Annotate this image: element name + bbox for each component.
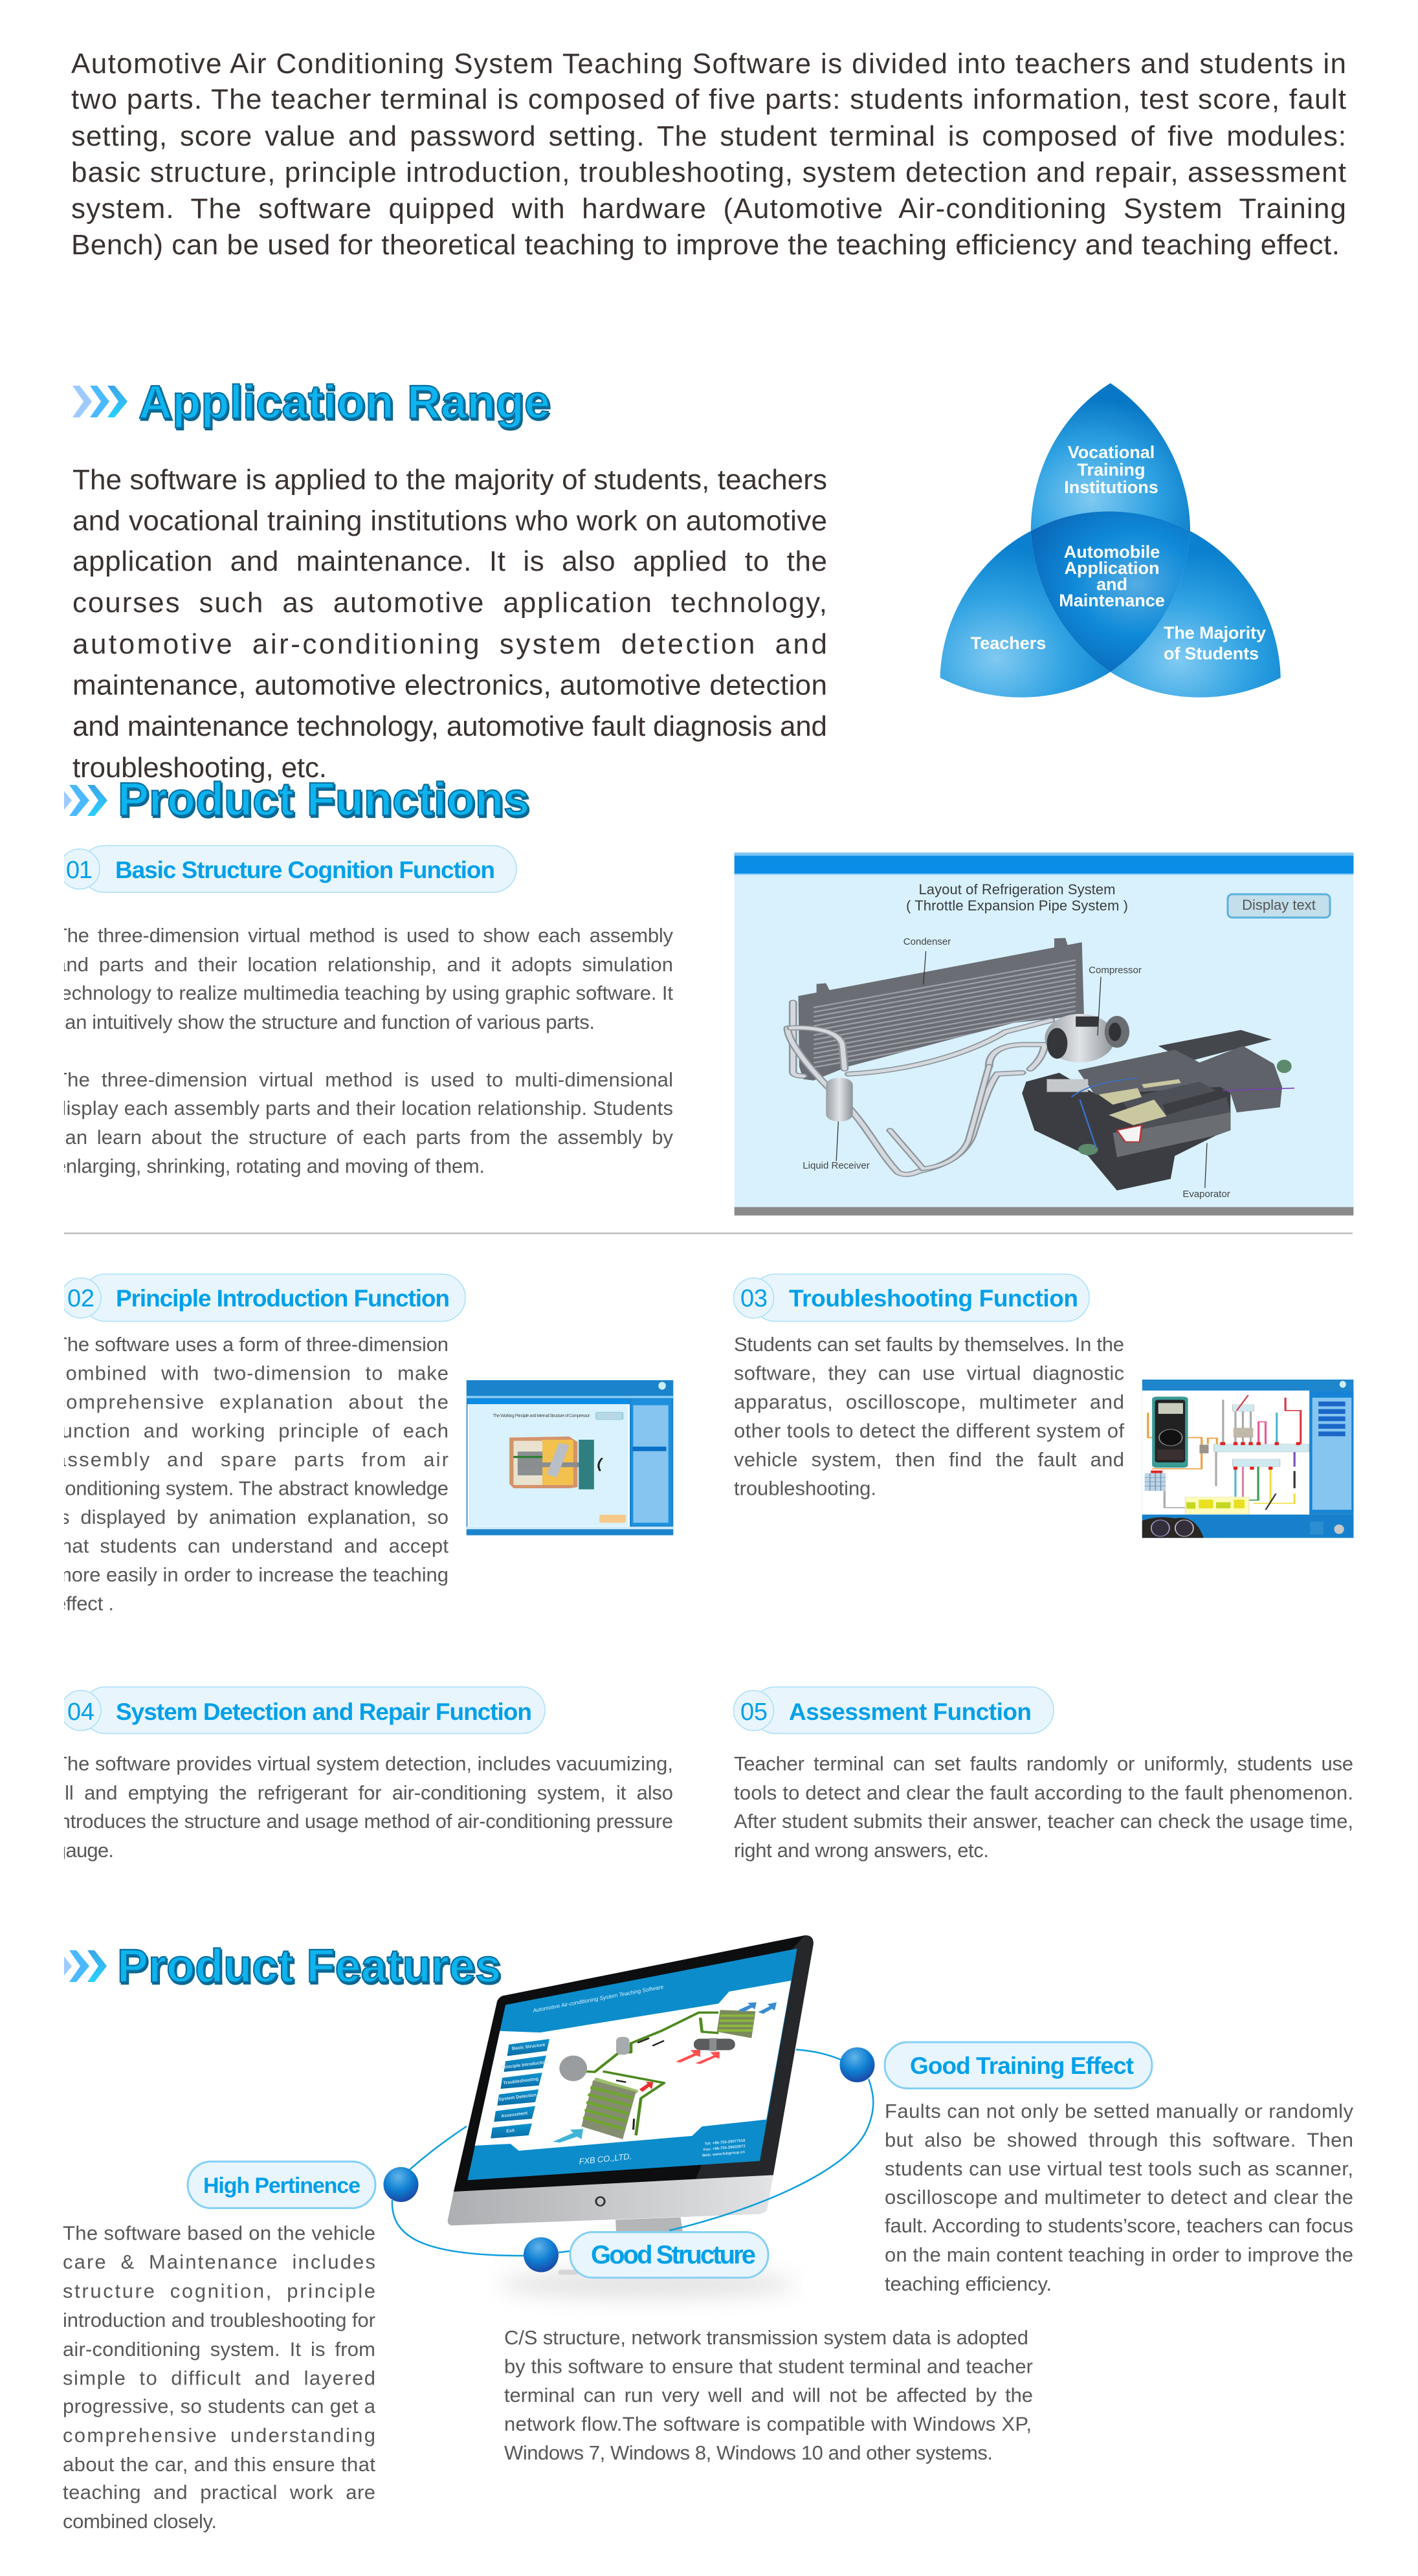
panel: function 02 [55,1274,673,1615]
text: good training effect description: teaching efficiency. [885,2273,1052,2295]
intro paragraph: two parts. The teacher terminal is composed of five parts: students information, test score, fault [71,83,1346,115]
refrigerant circuit [583,2012,718,2135]
icon: ball high pertinence [383,2167,418,2202]
text: good training effect description [885,2100,1354,2295]
text: function 05 description: Teacher terminal can set faults randomly or uniformly, students use [734,1752,1353,1775]
menu labels: Exit [506,2128,515,2134]
intro paragraph: Automotive Air Conditioning System Teaching Software is divided into teachers and students in [71,48,1346,80]
text: function 03 description: Students can set faults by themselves. In the [734,1333,1124,1356]
text: function 02 description: combined with two-dimension to make [55,1361,449,1385]
connector lines [392,2050,873,2256]
label: Teachers: Teachers [971,633,1046,653]
yellow module [1185,1497,1249,1514]
panel: function 05 [734,1687,1353,1862]
intro paragraph: basic structure, principle introduction, troubleshooting, system detection and repair, assessment [71,157,1346,188]
text: application range description: The software is applied to the majority of students, teachers [72,464,827,496]
text: function 02 description: function and working principle of each [55,1420,449,1442]
fuse grid [1145,1473,1166,1491]
pill heading 05: Assessment Function [789,1699,1032,1725]
contact details: Tel: +86-755-29077518 [705,2139,746,2146]
text: function 01 description: enlarging, shrinking, rotating and moving of them. [55,1154,485,1178]
part labels [803,936,1230,1200]
callout: High Pertinence [188,2161,375,2208]
part labels: Liquid Receiver [803,1160,870,1171]
text: function 01 description: and parts and their location relationship, and it adopts simulation [55,953,673,976]
text: function 02 description [55,1333,449,1615]
text: good structure description: terminal can run very well and will not be affected by the [504,2384,1033,2406]
text: good structure description: by this software to ensure that student terminal and teacher [504,2355,1033,2377]
pill heading 03 [734,1274,1089,1321]
text: function 01 description: The three-dimension virtual method is used to show each assembly [55,924,673,947]
label: Vocational Training Institutions: Institutions [1064,478,1158,497]
text: function 04 description: fill and emptying the refrigerant for air-conditioning system, it also [55,1781,673,1804]
evaporator housing [1022,1030,1294,1191]
text: function 02 description: is displayed by animation explanation, so [55,1506,449,1528]
button: play animation [599,1515,626,1523]
text: high pertinence description: simple to difficult and layered [63,2367,375,2389]
air arrows [553,2002,777,2142]
monitor stand [615,2218,683,2232]
screen caption: The Working Principle and Internal Structure of Compressor [493,1414,590,1418]
monitor shadow [498,2270,796,2298]
text: function 02 description: that students can understand and accept [55,1535,449,1557]
sidebar items [1318,1402,1346,1437]
menu labels: Principle Introduction [501,2060,548,2070]
icon: ball good training effect [840,2047,875,2082]
label: Automobile Application and Maintenance: and [1096,575,1127,594]
contact details [702,2139,746,2158]
text: function 01 description: The three-dimension virtual method is used to multi-dimensional [55,1068,673,1091]
pill heading 02: Principle Introduction Function [116,1285,450,1312]
label: Vocational Training Institutions [1064,443,1158,497]
label: Vocational Training Institutions: Vocational [1068,443,1155,462]
text: function 02 description: comprehensive explanation about the [55,1391,449,1413]
petal: top [1031,383,1190,531]
text: function 02 description: more easily in order to increase the teaching [55,1563,449,1586]
wiring [1148,1398,1301,1508]
pill heading 01 [60,846,516,892]
text: function 02 description: The software uses a form of three-dimension [55,1333,449,1356]
text: function 02 description: assembly and spare parts from air [55,1448,449,1471]
label: The Majority of Students: The Majority [1164,623,1266,643]
condenser [799,938,1084,1081]
instrument gauges [1142,1517,1344,1538]
label: Automobile Application and Maintenance: Application [1064,558,1160,578]
text: function 01 description: can learn about the structure of each parts from the assembly by [55,1126,673,1149]
multimeter [1152,1396,1188,1468]
intro paragraph: setting, score value and password setting. The student terminal is composed of five modules: [71,120,1346,152]
compressor [1045,1014,1129,1062]
text: good training effect description: but also be showed through this software. Then [885,2129,1353,2151]
label: Automobile Application and Maintenance: Automobile [1064,542,1160,562]
pill heading 03: Troubleshooting Function [789,1285,1078,1312]
part labels: Compressor [1089,965,1142,976]
screen title: Automotive Air-conditioning System Teaching Software [532,1983,664,2014]
menu labels [498,2043,548,2134]
text: application range description: troubleshooting, etc. [72,752,327,784]
label: Automobile Application and Maintenance: Maintenance [1059,591,1165,610]
label: Vocational Training Institutions: Training [1077,460,1146,479]
label: The Majority of Students: of Students [1164,644,1259,663]
button: Display text: Display text [1242,897,1316,913]
text: application range description: maintenance, automotive electronics, automotive detection [72,669,827,701]
icon: chevrons product functions [64,785,107,816]
contact details: Fax: +86-755-29632973 [703,2144,746,2152]
pill heading 03: 03 [740,1285,768,1312]
icon: ball good structure [524,2238,559,2273]
text: good training effect description: oscilloscope and multimeter to detect and clear the [885,2186,1353,2208]
part labels: Condenser [903,936,951,947]
liquid receiver [826,1078,853,1121]
text: application range description: application and maintenance. It is also applied to the [72,545,827,577]
software screen [467,1948,797,2180]
text: good training effect description: on the main content teaching in order to improve the [885,2243,1353,2266]
panel: function 04 [55,1687,673,1862]
red terminals [1151,1442,1300,1473]
screenshot: compressor structure [467,1380,673,1536]
button: Display text [1228,894,1330,918]
heading: Product Features: Product Features [117,1941,501,1992]
label: Automobile Application and Maintenance [1059,542,1165,610]
diagram title: Layout of Refrigeration System [919,881,1116,897]
liquid receiver [616,2037,629,2054]
petal: right [1111,531,1281,698]
condenser coil [581,2080,636,2139]
text: high pertinence description: care & Maintenance includes [63,2251,375,2273]
text: application range description: automotive air-conditioning system detection and [72,628,827,660]
pill heading 01: Basic Structure Cognition Function [115,857,495,883]
text: high pertinence description: progressive, so students can get a [63,2395,376,2417]
icon: chevrons application range [72,386,127,417]
text: application range description: and vocational training institutions who work on automotive [72,505,827,537]
menu labels: Assessment [501,2111,528,2119]
text: function 03 description [734,1333,1124,1500]
text: high pertinence description: combined closely. [63,2510,217,2533]
text: high pertinence description: air-conditioning system. It is from [63,2338,375,2361]
leader lines [836,951,1207,1188]
pill heading 04: 04 [67,1699,94,1726]
diagram title [906,881,1128,914]
text: high pertinence description: structure cognition, principle [63,2280,375,2302]
text: function 05 description: tools to detect and clear the fault according to the fault phenomenon. [734,1781,1353,1804]
text: function 01 description [55,924,673,1178]
text: function 01 description: display each assembly parts and their location relationship. Students [55,1097,673,1119]
intro paragraph: system. The software quipped with hardware (Automotive Air-conditioning System Training [71,193,1346,225]
text: function 03 description: troubleshooting. [734,1477,876,1500]
text: good structure description [504,2326,1033,2464]
text: function 04 description [55,1752,673,1862]
text: function 04 description: The software provides virtual system detection, includes vacuumizing, [55,1752,673,1775]
petal: center [1031,511,1190,672]
text: function 04 description: introduces the structure and usage method of air-conditioning pressure [55,1810,673,1833]
pill heading 02: 02 [67,1285,94,1312]
text: application range description: courses such as automotive application technology, [72,587,827,619]
text: good training effect description: fault. According to students’score, teachers can focus [885,2214,1353,2237]
intro paragraph: Bench) can be used for theoretical teaching to improve the teaching efficiency and teaching effect. [71,229,1340,261]
panel: function 01 [55,846,673,1178]
menu labels: Basic Structure [512,2043,546,2051]
menu labels: System Detection [498,2093,537,2102]
panel: function 03 [734,1274,1353,1538]
text: good structure description: Windows 7, Windows 8, Windows 10 and other systems. [504,2441,993,2464]
text: function 05 description [734,1752,1353,1862]
text: function 02 description: effect . [55,1592,114,1615]
text: high pertinence description: about the car, and this ensure that [63,2453,375,2476]
text: high pertinence description: The software based on the vehicle [63,2222,375,2244]
company name: FXB CO.,LTD. [579,2151,632,2166]
text: function 04 description: gauge. [55,1839,114,1862]
pill heading 02 [61,1274,465,1321]
callout: Good Structure [570,2232,768,2278]
callout: Good Training Effect: Good Training Effect [910,2053,1134,2079]
pill heading 01: 01 [66,857,93,884]
intro paragraph [71,48,1346,261]
text: function 03 description: vehicle system, then find the fault and [734,1448,1124,1471]
pill heading 04: System Detection and Repair Function [116,1699,532,1725]
text: function 01 description: technology to realize multimedia teaching by using graphic software. It [55,982,673,1004]
text: function 01 description: can intuitively show the structure and function of various parts. [55,1011,595,1033]
menu labels: Troubleshooting [503,2077,538,2086]
callout: Good Structure: Good Structure [591,2241,756,2269]
screenshot: troubleshooting wiring [1142,1380,1353,1538]
compressor [559,2056,587,2081]
monitor chin [448,2175,773,2225]
petal: left [940,531,1111,698]
diagram title: ( Throttle Expansion Pipe System ) [906,897,1128,914]
text: high pertinence description: introduction and troubleshooting for [63,2309,375,2331]
text: high pertinence description: teaching and practical work are [63,2481,375,2504]
heading: Application Range: Application Range [138,377,550,428]
icon: chevrons product features [64,1950,107,1982]
text: function 05 description: right and wrong answers, etc. [734,1839,989,1862]
text: application range description [72,464,827,784]
evaporator coil [717,2010,755,2038]
pill heading 05: 05 [740,1699,768,1726]
text: application range description: and maintenance technology, automotive fault diagnosis and [72,710,827,742]
callout: Good Training Effect [885,2042,1152,2089]
label: The Majority of Students [1164,623,1266,663]
venn diagram: application range [940,383,1281,698]
pill heading 05 [734,1687,1054,1734]
contact details: Web: www.fxbgroup.cn [702,2150,746,2158]
text: function 03 description: software, they can use virtual diagnostic [734,1361,1124,1385]
illustration: desktop monitor with software screen [448,1935,814,2275]
text: function 03 description: apparatus, oscilloscope, multimeter and [734,1391,1124,1413]
text: good training effect description: Faults can not only be setted manually or randomly [885,2100,1354,2122]
text: good training effect description: students can use virtual test tools such as scanner, [885,2157,1353,2180]
part labels: Evaporator [1182,1189,1230,1200]
arrow icons [616,2038,664,2130]
text: function 05 description: After student submits their answer, teacher can check the usage time, [734,1810,1353,1833]
text: function 03 description: other tools to detect the different system of [734,1420,1124,1442]
button: display text small [596,1412,623,1420]
pill heading 04 [61,1687,545,1734]
heading: Product Functions: Product Functions [118,774,529,826]
menu buttons [491,2039,549,2139]
text: function 02 description: conditioning system. The abstract knowledge [55,1477,449,1500]
monitor bezel [454,1935,814,2193]
text: high pertinence description: comprehensive understanding [63,2424,375,2447]
refrigerant pipes [788,1002,1051,1174]
text: high pertinence description [63,2222,376,2533]
text: good structure description: C/S structure, network transmission system data is adopted [504,2326,1028,2349]
screenshot: layout of refrigeration system [735,853,1353,1215]
callout: High Pertinence: High Pertinence [203,2174,360,2198]
compressor cutaway [509,1437,603,1490]
blower [694,2038,735,2051]
text: good structure description: network flow.The software is compatible with Windows XP, [504,2412,1032,2436]
